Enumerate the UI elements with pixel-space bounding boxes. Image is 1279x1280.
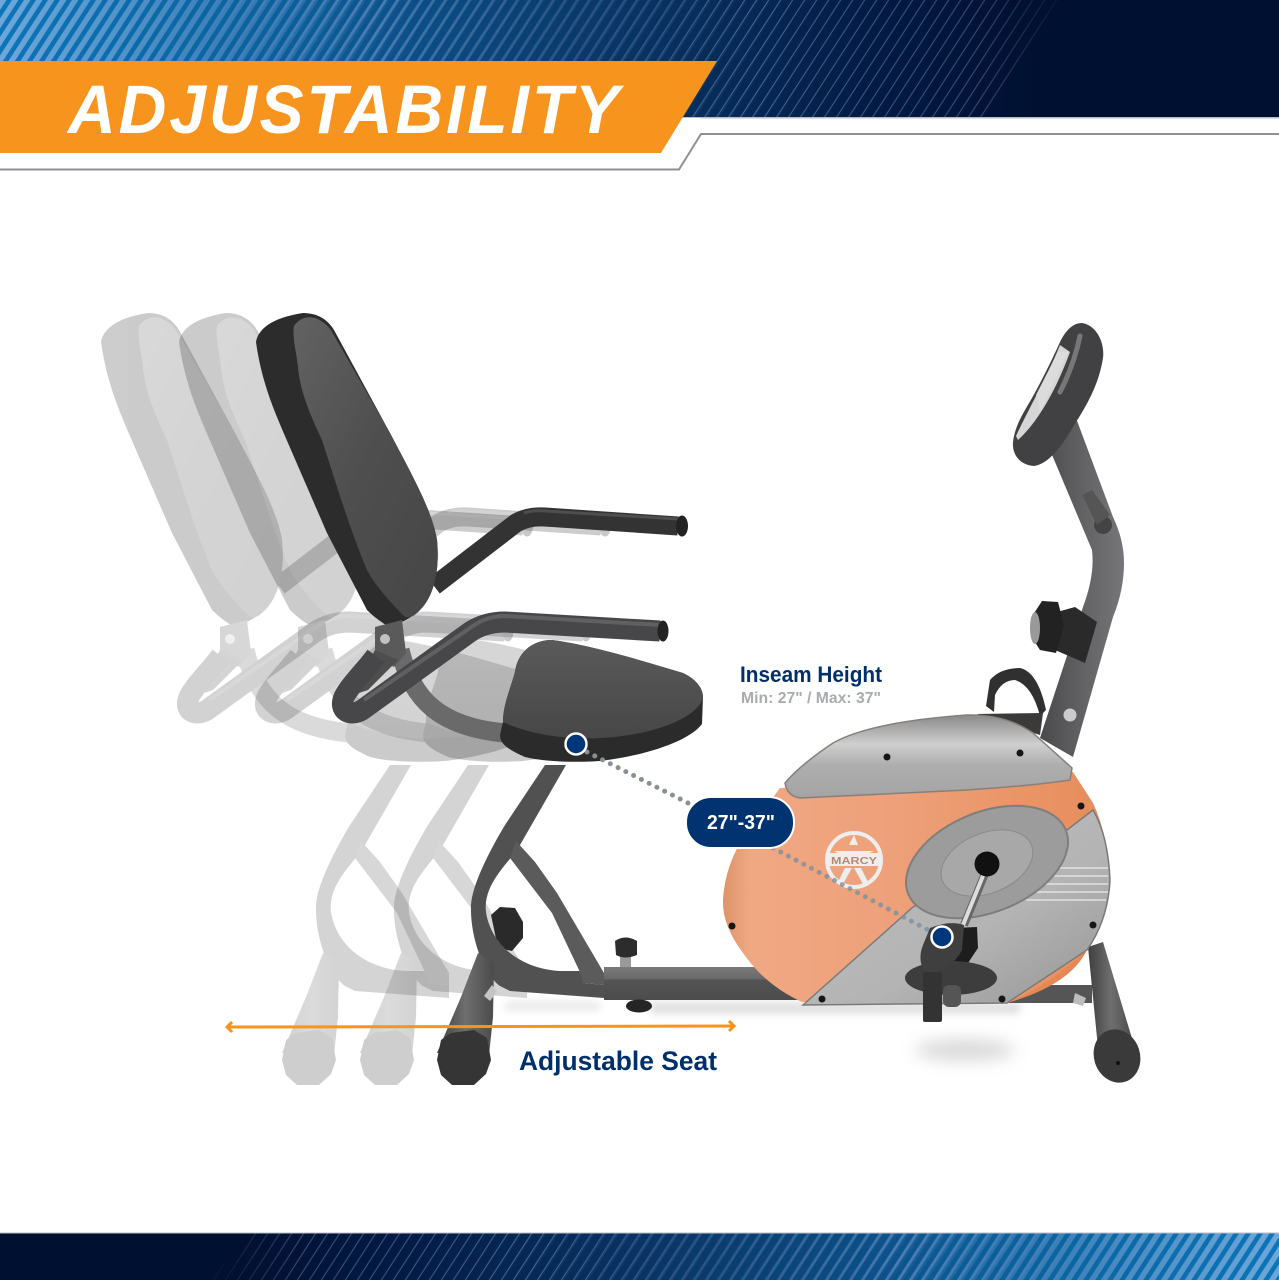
ghost seat position: middle xyxy=(179,313,626,1085)
adjustment knob xyxy=(615,938,637,967)
rail foot xyxy=(626,1000,652,1012)
inseam height label: Inseam Height xyxy=(740,662,883,687)
front pedal xyxy=(905,923,997,1022)
ghost seat position: rearmost xyxy=(101,313,548,1085)
title ribbon xyxy=(0,61,717,153)
bike flywheel housing xyxy=(723,715,1110,1005)
adjustable seat label: Adjustable Seat xyxy=(519,1046,717,1076)
title: ADJUSTABILITY xyxy=(66,71,625,148)
ground shadows xyxy=(505,1002,1020,1061)
dotted leader line upper xyxy=(587,752,692,805)
top banner xyxy=(0,0,1279,118)
hub and crank xyxy=(964,866,988,925)
inseam height label: Min: 27" / Max: 37" xyxy=(741,690,881,707)
crank disc xyxy=(889,784,1085,940)
inseam range pill: 27"-37" xyxy=(707,812,775,834)
rear foot tube and cap xyxy=(1073,942,1147,1089)
Marcy logo: MARCY xyxy=(831,855,877,867)
resistance knob xyxy=(1030,601,1097,663)
front foot bolt xyxy=(484,985,497,1001)
bottom banner xyxy=(0,1232,1279,1280)
marker: pedal xyxy=(932,926,952,948)
housing screws xyxy=(728,750,1096,1002)
silver top cover xyxy=(785,715,1072,798)
header outline stroke xyxy=(0,118,1279,170)
console post xyxy=(1040,410,1124,757)
orange corner xyxy=(1007,950,1087,1003)
bike base rail xyxy=(604,938,1092,1012)
main seat assembly xyxy=(256,313,703,1085)
orange double arrow xyxy=(227,1021,734,1032)
silver lower panel xyxy=(803,810,1110,1005)
dotted leader line lower xyxy=(773,848,930,931)
inseam height label xyxy=(740,662,883,707)
orange shell xyxy=(723,772,1110,1003)
rear pedal and strap xyxy=(977,668,1076,735)
console xyxy=(1013,323,1112,534)
vent ribs xyxy=(1026,868,1108,900)
Marcy logo xyxy=(827,833,881,887)
seat adjustment knob xyxy=(491,907,523,951)
marker: seat xyxy=(566,734,586,754)
inseam range pill xyxy=(686,797,794,848)
